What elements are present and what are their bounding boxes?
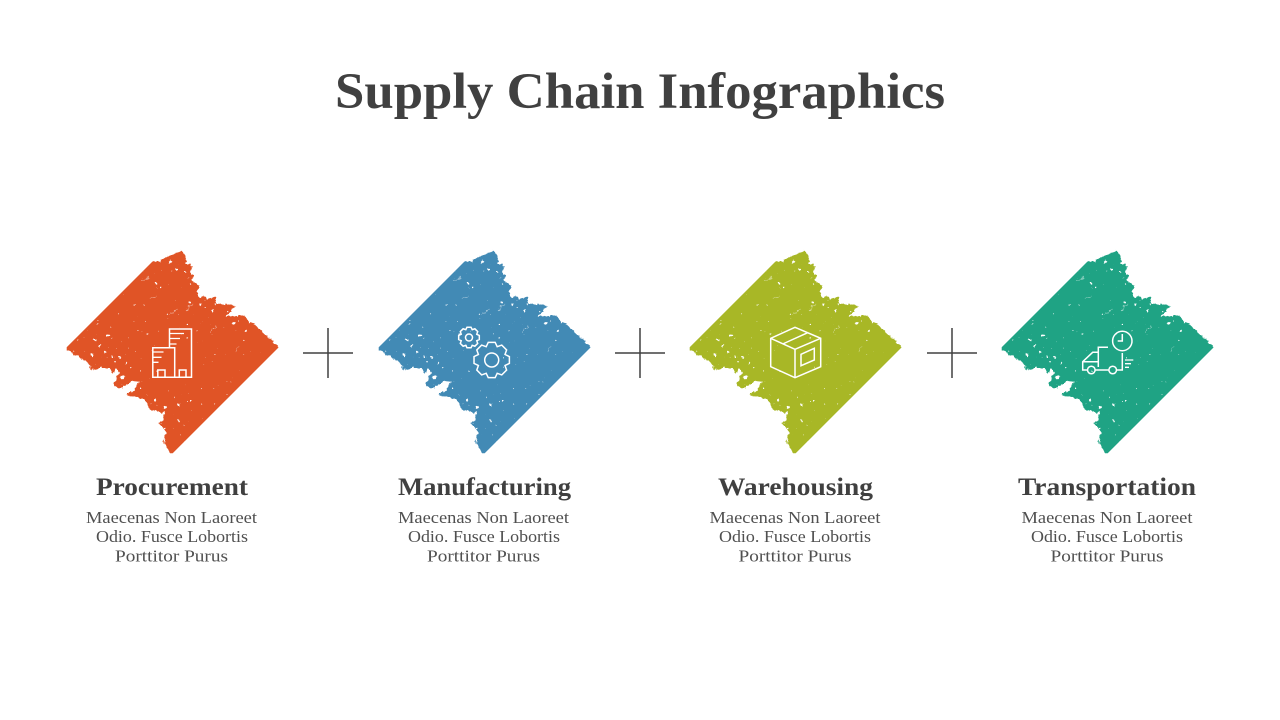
text: manufacturing description: Odio. Fusce Lobortis: [408, 527, 560, 546]
icon: plus 1: [303, 328, 353, 378]
text: transportation description: Maecenas Non Laoreet: [1022, 508, 1193, 527]
panel: manufacturing: [370, 250, 592, 566]
text: procurement description: Maecenas Non Laoreet: [86, 508, 257, 527]
text: procurement description: Porttitor Purus: [115, 546, 228, 566]
text: manufacturing description: Porttitor Purus: [427, 546, 540, 566]
panel: transportation: [993, 250, 1215, 566]
text: warehousing description: Maecenas Non Laoreet: [710, 508, 881, 527]
heading: procurement: Procurement: [96, 472, 249, 501]
panel: procurement: [58, 250, 280, 566]
text: warehousing description: Porttitor Purus: [738, 546, 852, 566]
title: Supply Chain Infographics: [335, 64, 945, 120]
text: transportation description: Odio. Fusce Lobortis: [1031, 527, 1183, 546]
icon: plus 2: [615, 328, 665, 378]
text: procurement description: [86, 508, 257, 566]
diamond: manufacturing: [370, 250, 592, 456]
diamond: warehousing: [681, 250, 903, 456]
diamond: transportation: [993, 250, 1215, 456]
text: procurement description: Odio. Fusce Lobortis: [96, 527, 248, 546]
icon: buildings: [153, 329, 192, 377]
icon: gears: [459, 327, 509, 378]
text: warehousing description: Odio. Fusce Lobortis: [719, 527, 871, 546]
heading: warehousing: Warehousing: [718, 472, 873, 501]
icon: plus 3: [927, 328, 977, 378]
panel: warehousing: [681, 250, 903, 566]
text: warehousing description: [710, 508, 881, 566]
icon: truck with clock: [1083, 331, 1133, 374]
text: transportation description: Porttitor Purus: [1050, 546, 1164, 566]
icon: box: [771, 327, 821, 378]
heading: transportation: Transportation: [1018, 472, 1196, 501]
text: transportation description: [1022, 508, 1193, 566]
heading: manufacturing: Manufacturing: [398, 472, 571, 501]
text: manufacturing description: Maecenas Non Laoreet: [398, 508, 569, 527]
diamond: procurement: [58, 250, 280, 456]
text: manufacturing description: [398, 508, 569, 566]
